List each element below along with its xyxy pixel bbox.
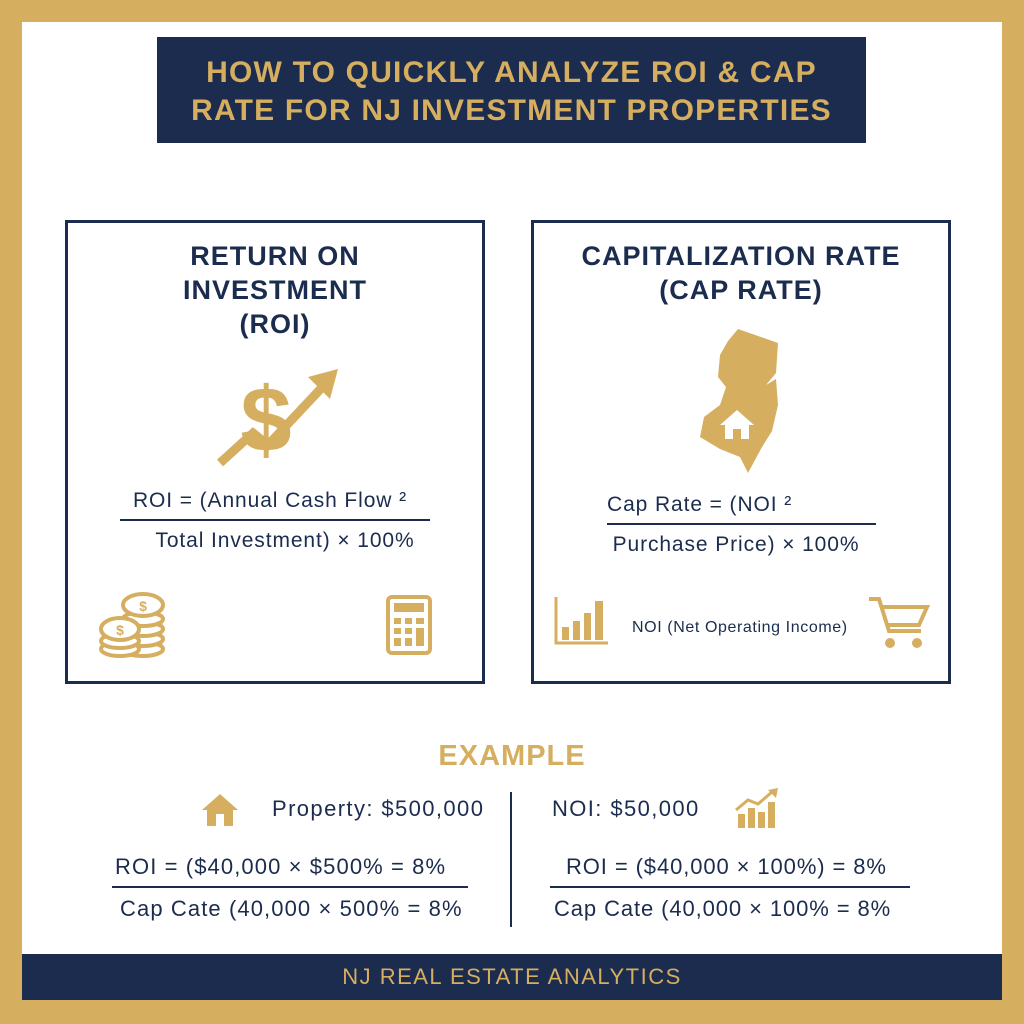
formulas right: ROI = ($40,000 × 100%) = 8% — [566, 854, 887, 879]
heading: Example: EXAMPLE — [438, 740, 586, 772]
title banner — [157, 37, 866, 143]
example right — [550, 788, 910, 921]
formula: ROI: Total Investment) × 100% — [155, 529, 415, 552]
text: NOI value: NOI: $50,000 — [552, 796, 700, 821]
formula: Cap Rate — [607, 493, 876, 556]
icon: calculator — [386, 595, 432, 655]
formulas left: Cap Cate (40,000 × 500% = 8% — [120, 896, 463, 921]
title banner: HOW TO QUICKLY ANALYZE ROI & CAP — [206, 56, 817, 89]
heading: Cap Rate: (CAP RATE) — [659, 275, 823, 305]
panel: ROI — [65, 220, 485, 684]
text: property value: Property: $500,000 — [272, 796, 484, 821]
icon: bar chart — [554, 597, 608, 644]
divider — [510, 792, 512, 927]
icon: growth chart — [735, 788, 778, 828]
panel: Cap Rate — [531, 220, 951, 684]
icon: house — [202, 794, 238, 826]
formulas left: ROI = ($40,000 × $500% = 8% — [115, 854, 446, 879]
heading: Cap Rate — [582, 241, 900, 305]
formula: Cap Rate: Purchase Price) × 100% — [613, 533, 859, 556]
title banner: RATE FOR NJ INVESTMENT PROPERTIES — [191, 94, 832, 127]
heading: ROI: INVESTMENT — [183, 275, 367, 305]
formulas left — [112, 854, 468, 921]
formulas right: Cap Cate (40,000 × 100% = 8% — [554, 896, 891, 921]
icon: cart — [869, 597, 930, 648]
heading: ROI: (ROI) — [240, 309, 310, 339]
formula: ROI — [120, 489, 430, 552]
formula: ROI: ROI = (Annual Cash Flow ² — [133, 489, 407, 512]
icon: dollar with arrow — [217, 369, 338, 471]
icon: coins: $ — [139, 598, 147, 614]
icon: coins: $ — [116, 622, 124, 638]
footer band — [22, 954, 1002, 1000]
example left — [112, 794, 484, 921]
heading: ROI: RETURN ON — [190, 241, 360, 271]
label: NOI definition: NOI (Net Operating Income) — [632, 619, 848, 636]
heading: Cap Rate: CAPITALIZATION RATE — [582, 241, 900, 271]
footer band: NJ REAL ESTATE ANALYTICS — [342, 964, 682, 989]
icon: coins — [99, 592, 165, 658]
icon: NJ map with house — [700, 329, 778, 473]
heading: ROI — [183, 241, 367, 339]
formulas right — [550, 854, 910, 921]
icon: dollar with arrow: $ — [240, 369, 292, 471]
formula: Cap Rate: Cap Rate = (NOI ² — [607, 493, 792, 516]
